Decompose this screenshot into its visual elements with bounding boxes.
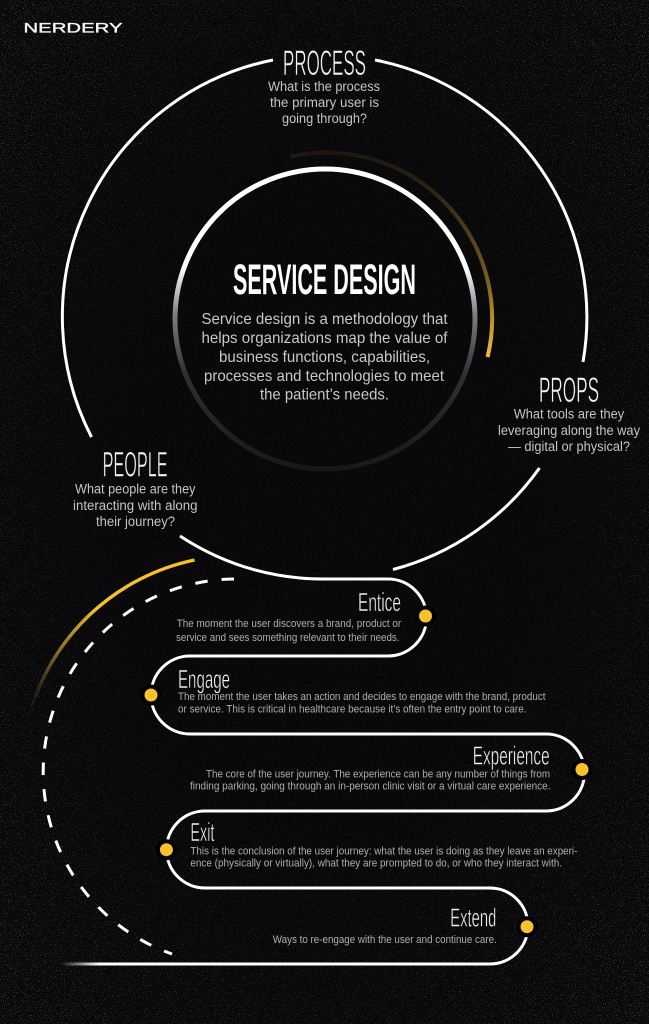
dashed return arc	[43, 579, 234, 954]
label: people: PEOPLE	[103, 446, 168, 485]
description	[202, 311, 448, 404]
step: engage: The moment the user takes an action and decides to engage with the brand, product	[178, 691, 546, 703]
gold arc around centre circle	[290, 153, 492, 357]
description: Service design is a methodology that	[202, 311, 448, 328]
step: experience	[190, 740, 592, 793]
step: entice: service and sees something relevant to their needs.	[176, 632, 400, 644]
journey serpentine line	[60, 536, 584, 964]
marker	[415, 606, 436, 626]
step: engage: Engage	[178, 664, 230, 694]
description: helps organizations map the value of	[202, 330, 448, 347]
label: props	[498, 371, 640, 454]
step: engage	[140, 664, 546, 716]
step: exit: This is the conclusion of the user journey: what the user is doing as they leave an experi-	[190, 845, 578, 857]
marker	[156, 839, 177, 860]
label: props: leveraging along the way	[498, 423, 640, 438]
step: entice: The moment the user discovers a brand, product or	[177, 618, 401, 630]
label: process	[268, 44, 380, 126]
step: experience: finding parking, going through an in-person clinic visit or a virtual care experience.	[190, 781, 550, 793]
step: exit: ence (physically or virtually), what they are prompted to do, or who they interact with.	[190, 857, 562, 869]
heading: service design: SERVICE DESIGN	[233, 256, 416, 304]
description: processes and technologies to meet	[204, 368, 445, 385]
label: process: PROCESS	[283, 44, 366, 83]
step: experience: Experience	[473, 740, 550, 770]
step: engage: or service. This is critical in healthcare because it’s often the entry point to care.	[178, 704, 526, 716]
step: exit	[156, 817, 578, 869]
step: entice	[176, 587, 436, 644]
label: process: the primary user is	[270, 95, 379, 110]
label: props: What tools are they	[514, 407, 624, 422]
logo: Nerdery: NERDERY	[24, 20, 123, 36]
label: process: going through?	[282, 111, 367, 126]
label: people: What people are they	[75, 481, 196, 496]
step: extend	[273, 903, 538, 946]
label: people: interacting with along	[73, 498, 198, 513]
marker	[140, 684, 162, 706]
outer ring: process, props, people	[62, 60, 587, 570]
marker	[516, 916, 538, 937]
label: process: What is the process	[268, 79, 380, 94]
step: experience: The core of the user journey. The experience can be any number of things from	[206, 768, 550, 780]
label: props: — digital or physical?	[508, 439, 630, 454]
marker	[572, 759, 592, 780]
gold arc beside journey	[29, 560, 194, 717]
label: people	[73, 446, 198, 529]
label: people: their journey?	[96, 514, 175, 529]
centre text block	[202, 256, 448, 404]
centre circle	[175, 169, 475, 469]
description: the patient’s needs.	[260, 386, 389, 404]
step: entice: Entice	[358, 587, 401, 617]
step: extend: Extend	[450, 903, 496, 933]
description: business functions, capabilities,	[219, 349, 430, 366]
step: exit: Exit	[190, 817, 215, 847]
step: extend: Ways to re-engage with the user and continue care.	[273, 934, 497, 946]
